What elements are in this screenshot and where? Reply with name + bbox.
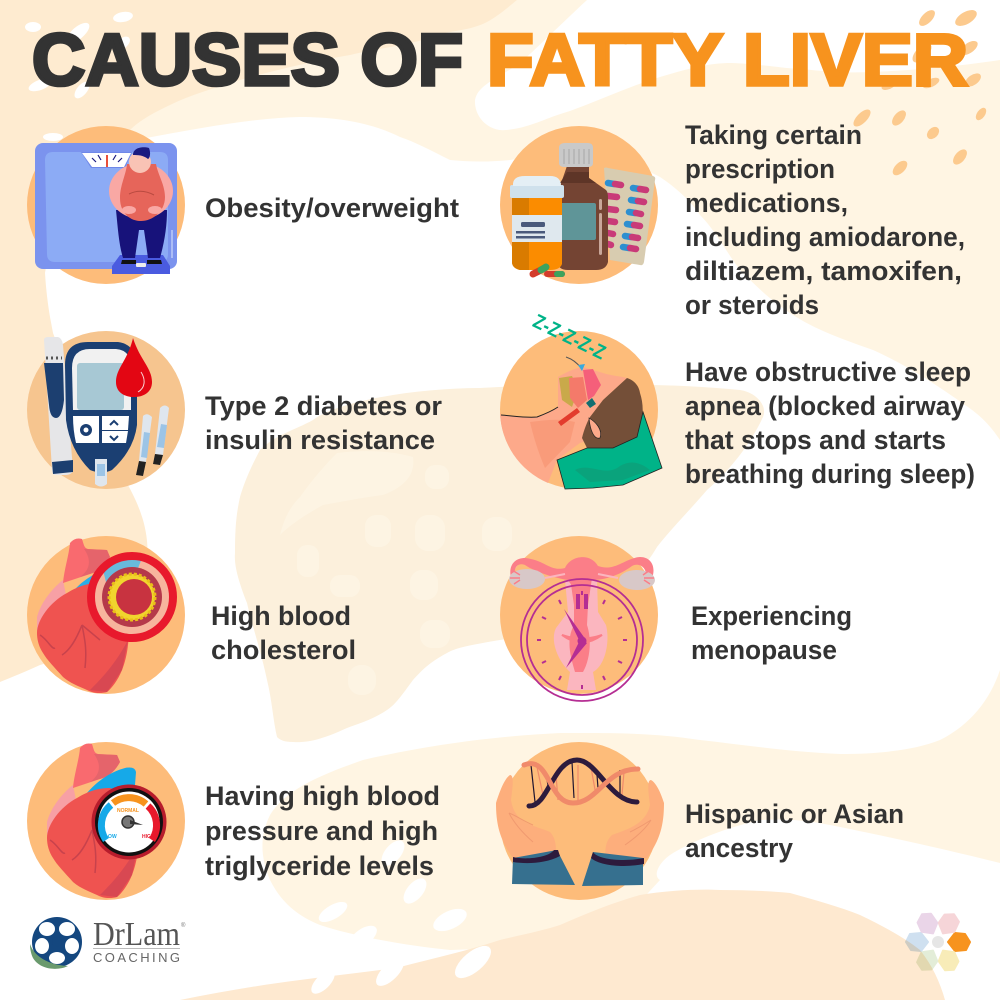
text: blood pressure (205, 781, 440, 881)
text: sleep apnea (685, 357, 975, 489)
icon: heart with blood pressure gauge (27, 742, 185, 900)
icon: glucose meter and blood drop (27, 331, 185, 489)
text: cholesterol (211, 601, 356, 665)
icon: heart with clogged artery (27, 536, 185, 694)
text: ancestry: ancestry (685, 833, 793, 863)
background: light cream top band (0, 0, 1000, 440)
text: cholesterol: High blood (211, 601, 351, 631)
text: sleep apnea: Have obstructive sleep (685, 357, 971, 387)
title: CAUSES OF (32, 20, 463, 101)
icon: heart with blood pressure gauge: LOW (105, 834, 117, 840)
text: blood pressure: pressure and high (205, 816, 438, 846)
background: dark cream bottom wave (180, 890, 945, 1000)
icon: heart with blood pressure gauge: HIGH (142, 834, 155, 840)
background: white splash dots (25, 10, 496, 998)
text: ancestry (685, 799, 904, 863)
icon: heart with blood pressure gauge: NORMAL (117, 808, 139, 814)
text: sleep apnea: that stops and starts (685, 425, 946, 455)
title: FATTY LIVER (487, 20, 968, 101)
icon: sleep apnea (500, 310, 662, 489)
text: medications (685, 120, 965, 320)
background: light cream lower band (262, 670, 1000, 950)
icon: medications (500, 126, 658, 284)
icon: obesity on scale (27, 126, 185, 284)
text: menopause (691, 601, 852, 665)
logo: DrLam Coaching: ® (181, 922, 186, 929)
text: blood pressure: triglyceride levels (205, 851, 434, 881)
text: blood pressure: Having high blood (205, 781, 440, 811)
logo: DrLam Coaching: DrLam (93, 916, 180, 953)
logo: DrLam Coaching (30, 916, 186, 969)
text: medications: Taking certain (685, 120, 862, 150)
text: medications: prescription (685, 154, 835, 184)
text: menopause: Experiencing (691, 601, 852, 631)
icon: menopause clock and uterus (500, 536, 658, 701)
text: sleep apnea: apnea (blocked airway (685, 391, 965, 421)
text: medications: including amiodarone, (685, 222, 965, 252)
text: medications: or steroids (685, 290, 819, 320)
text: cholesterol: cholesterol (211, 635, 356, 665)
logo: DrLam Coaching: COACHING (93, 950, 180, 965)
text: menopause: menopause (691, 635, 837, 665)
text: obesity: Obesity/overweight (205, 193, 459, 223)
text: ancestry: Hispanic or Asian (685, 799, 904, 829)
text: medications: diltiazem, tamoxifen, (685, 256, 962, 286)
background: liver highlights and fatty patches (280, 451, 512, 695)
icon: sleep apnea: Z-Z-Z-Z-Z (529, 310, 609, 364)
text: medications: medications, (685, 188, 848, 218)
text: diabetes (205, 391, 442, 455)
text: diabetes: Type 2 diabetes or (205, 391, 442, 421)
text: sleep apnea: breathing during sleep) (685, 459, 975, 489)
title (32, 20, 968, 101)
background: liver silhouette (235, 384, 764, 742)
background: dark cream top-left and left strip (0, 0, 517, 682)
icon: DNA in hands (496, 742, 664, 900)
icon: flower logo (906, 910, 970, 974)
background: orange dots (851, 7, 988, 178)
text: diabetes: insulin resistance (205, 425, 435, 455)
